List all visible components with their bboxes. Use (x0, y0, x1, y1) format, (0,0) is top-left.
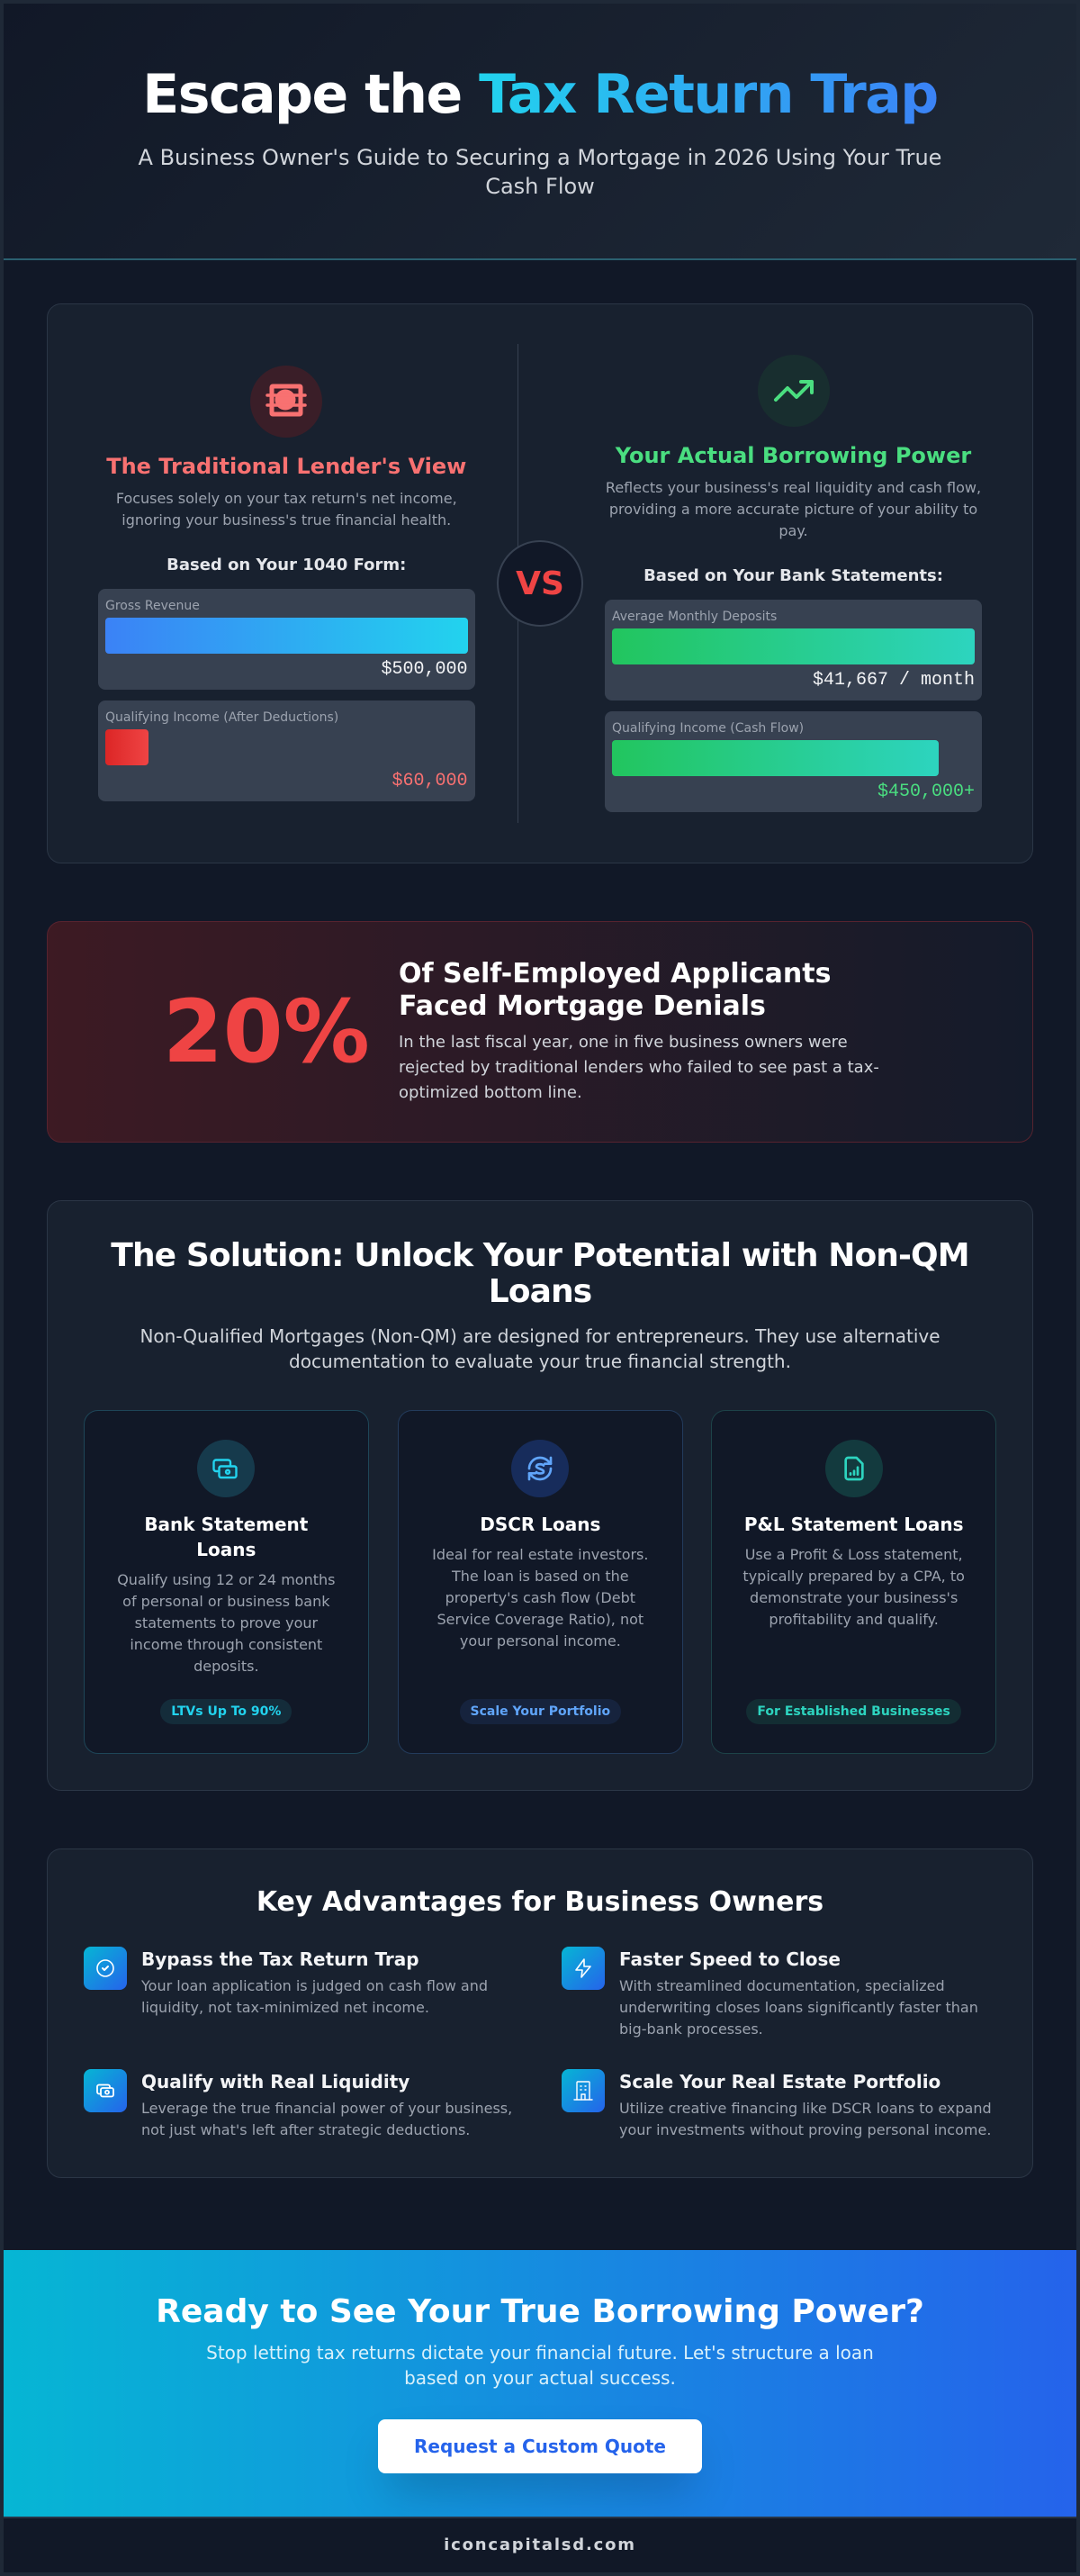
metric: qualifying income after deductions: Qualifying Income (After Deductions) (105, 710, 338, 725)
solution heading: Loans (489, 1273, 591, 1309)
subheading: bank statements: Based on Your Bank Statements: (644, 566, 943, 585)
subheading: 1040 form: Based on Your 1040 Form: (166, 556, 406, 574)
metric: qualifying income cash flow (605, 711, 982, 812)
advantage text (141, 2071, 512, 2138)
cta description: Stop letting tax returns dictate your financial future. Let's structure a loan (206, 2342, 874, 2364)
advantages heading: Key Advantages for Business Owners (256, 1885, 824, 1918)
vs badge (497, 540, 583, 627)
stat: 20%: 20% (163, 981, 370, 1082)
icon: banknote (250, 366, 322, 438)
stat description: optimized bottom line. (399, 1083, 582, 1102)
card title: P&L Statement Loans (744, 1514, 963, 1535)
icon: refresh dollar (511, 1440, 569, 1497)
subtitle (139, 145, 941, 199)
panel: key advantages (47, 1848, 1033, 2178)
card: bank statement loans (84, 1410, 369, 1754)
heading: traditional lender: The Traditional Lender's View (106, 454, 466, 479)
metric: average monthly deposits: Average Monthly Deposits (612, 610, 777, 624)
advantage text (619, 2071, 992, 2138)
solution description: Non-Qualified Mortgages (Non-QM) are designed for entrepreneurs. They use alternative (140, 1325, 940, 1347)
footer (4, 2517, 1076, 2572)
metric: gross revenue: $500,000 (381, 659, 468, 680)
chip: For Established Businesses (757, 1704, 950, 1719)
stat heading (399, 958, 831, 1022)
advantage: scale your real estate portfolio (562, 2069, 992, 2138)
chip (460, 1699, 621, 1724)
advantage: qualify with real liquidity (84, 2069, 512, 2138)
stat heading: Faced Mortgage Denials (399, 990, 766, 1022)
solution heading (111, 1237, 969, 1309)
icon: building (562, 2069, 605, 2112)
cta button (378, 2419, 702, 2473)
header (4, 4, 1076, 260)
heading: borrowing power: Your Actual Borrowing Power (616, 443, 971, 468)
column: actual borrowing power (605, 355, 982, 812)
stat heading: Of Self-Employed Applicants (399, 958, 831, 990)
metric: average monthly deposits (605, 600, 982, 700)
chip: Scale Your Portfolio (471, 1704, 610, 1719)
panel: comparison (47, 303, 1033, 863)
chip (160, 1699, 292, 1724)
advantage text: Qualify with Real Liquidity (141, 2071, 410, 2092)
footer website: iconcapitalsd.com (444, 2535, 636, 2554)
metric: qualifying income cash flow: Qualifying Income (Cash Flow) (612, 721, 804, 736)
advantage text: Leverage the true financial power of your business, not just what's left after strategic deductions. (141, 2100, 512, 2138)
cta description (206, 2342, 874, 2389)
advantage text: Faster Speed to Close (619, 1948, 841, 1970)
icon: trending up (758, 355, 830, 427)
chip: LTVs Up To 90% (171, 1704, 281, 1719)
panel: solution (47, 1200, 1033, 1791)
card description: Ideal for real estate investors. The loan is based on the property's cash flow (Debt Service Coverage Ratio), not your personal income. (432, 1546, 648, 1650)
advantage: faster speed to close (562, 1947, 978, 2038)
metric: average monthly deposits: $41,667 / month (813, 670, 975, 691)
chip (746, 1699, 961, 1724)
metric: gross revenue: Gross Revenue (105, 599, 200, 613)
icon: cash (84, 2069, 127, 2112)
subtitle: Cash Flow (485, 174, 595, 199)
description: traditional lender: Focuses solely on your tax return's net income, ignoring your business's true financial health. (116, 490, 457, 529)
icon: check circle (84, 1947, 127, 1990)
solution description: documentation to evaluate your true financial strength. (289, 1351, 791, 1372)
stat description (399, 1033, 879, 1102)
stat description: rejected by traditional lenders who failed to see past a tax- (399, 1058, 879, 1077)
advantage text (619, 1948, 978, 2038)
cta button: Request a Custom Quote (414, 2436, 666, 2457)
advantage text: Utilize creative financing like DSCR loans to expand your investments without proving personal income. (619, 2100, 992, 2138)
solution description (140, 1325, 940, 1372)
panel: statistic (47, 921, 1033, 1143)
icon: bolt (562, 1947, 605, 1990)
advantage text: Bypass the Tax Return Trap (141, 1948, 419, 1970)
metric: qualifying income after deductions: $60,000 (392, 771, 468, 791)
vs badge: VS (516, 565, 564, 601)
stat description: In the last fiscal year, one in five business owners were (399, 1033, 848, 1052)
card title: Bank Statement Loans (144, 1514, 308, 1560)
call to action (4, 2250, 1076, 2517)
card title: DSCR Loans (480, 1514, 600, 1535)
advantage text: With streamlined documentation, specialized underwriting closes loans significantly faster than big-bank processes. (619, 1977, 978, 2038)
description: borrowing power: Reflects your business's real liquidity and cash flow, providing a more accurate picture of your ability to pay. (606, 479, 981, 539)
card description: Qualify using 12 or 24 months of personal or business bank statements to prove your income through consistent deposits. (117, 1571, 335, 1675)
card: p&l statement loans (711, 1410, 996, 1754)
subtitle: A Business Owner's Guide to Securing a Mortgage in 2026 Using Your True (139, 145, 941, 170)
metric: qualifying income after deductions (98, 700, 475, 801)
icon: document chart (825, 1440, 883, 1497)
column: traditional lender's view (98, 366, 475, 801)
card: dscr loans (398, 1410, 683, 1754)
icon: cash (197, 1440, 255, 1497)
advantage: bypass the tax return trap (84, 1947, 488, 2016)
solution heading: The Solution: Unlock Your Potential with Non-QM (111, 1237, 969, 1273)
cta description: based on your actual success. (404, 2367, 676, 2389)
metric: qualifying income cash flow: $450,000+ (878, 782, 975, 802)
metric: gross revenue (98, 589, 475, 690)
cta heading: Ready to See Your True Borrowing Power? (156, 2293, 924, 2330)
title: Escape the Tax Return Trap (142, 63, 938, 126)
advantage text: Scale Your Real Estate Portfolio (619, 2071, 940, 2092)
card description: Use a Profit & Loss statement, typically prepared by a CPA, to demonstrate your business's profitability and qualify. (742, 1546, 965, 1628)
advantage text: Your loan application is judged on cash flow and liquidity, not tax-minimized net income. (141, 1977, 488, 2016)
advantage text (141, 1948, 488, 2016)
